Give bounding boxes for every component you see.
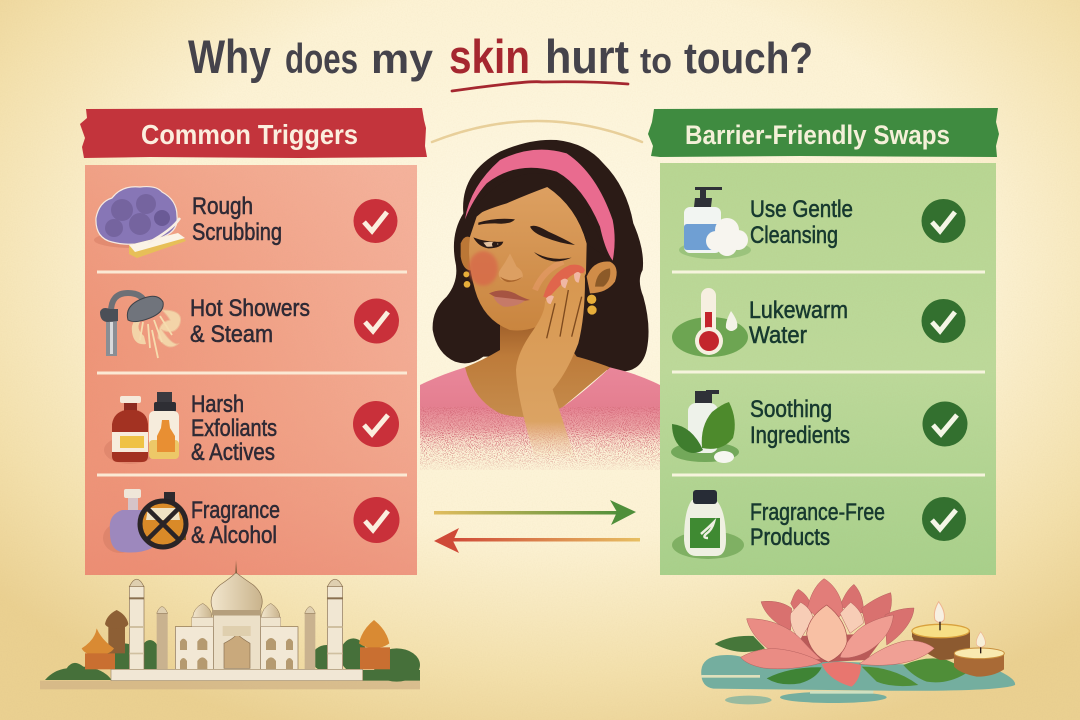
icon: shower head with steam [100, 293, 181, 358]
label: Lukewarm [749, 297, 848, 324]
ribbon: swaps heading: Barrier-Friendly Swaps [685, 120, 950, 150]
check badge [354, 199, 398, 243]
hand and forearm [516, 273, 585, 458]
label: Water [749, 322, 807, 349]
domes [192, 560, 281, 627]
row: fragrance-free products [672, 490, 966, 559]
plinth [111, 669, 363, 681]
icon: thermometer and droplet [672, 288, 748, 357]
candles [912, 602, 1004, 677]
shirt speckled fade [420, 407, 660, 470]
ground [40, 681, 420, 689]
trees [45, 638, 420, 682]
check badge [922, 199, 966, 243]
label: & Alcohol [191, 522, 277, 549]
title underline [452, 82, 628, 91]
label: Use Gentle [750, 196, 853, 223]
label: Rough [192, 193, 253, 220]
panel: common triggers [80, 108, 427, 575]
headband [465, 150, 615, 261]
decorative arc above portrait [432, 121, 642, 142]
row: gentle cleansing [679, 187, 966, 259]
lips [489, 290, 530, 307]
label: Fragrance [191, 497, 280, 524]
fingertips and lines [546, 272, 582, 338]
label [750, 396, 850, 449]
title [188, 30, 813, 91]
illustration: taj mahal [40, 560, 420, 689]
label [750, 499, 885, 551]
title: does [285, 35, 358, 82]
minarets [129, 579, 343, 669]
label: Cleansing [750, 222, 838, 249]
row: hot showers and steam [100, 293, 399, 358]
icon: crossed out perfume bottles [103, 489, 186, 553]
arrow: swaps to triggers [434, 528, 640, 553]
row: harsh exfoliants and actives [104, 391, 399, 466]
lotus petals back [761, 579, 914, 645]
hair fringe [467, 173, 607, 257]
row: fragrance and alcohol [103, 489, 400, 553]
check badge [922, 299, 966, 343]
lotus centre petal [807, 605, 847, 662]
label: Exfoliants [191, 415, 277, 442]
brows and eyes [473, 219, 575, 262]
check badge [922, 402, 968, 446]
neck and chest [465, 323, 610, 417]
side buildings [82, 610, 390, 669]
label [750, 196, 853, 249]
label: Products [750, 524, 830, 551]
nose [499, 253, 523, 282]
earrings [463, 271, 597, 315]
icon: pump bottle with foam [679, 187, 751, 259]
label: Fragrance-Free [750, 499, 885, 526]
label: & Steam [190, 321, 273, 348]
title: to [640, 40, 672, 81]
lotus petals middle [741, 602, 934, 669]
check badge [353, 401, 399, 447]
label [191, 391, 277, 466]
ears and face [461, 187, 617, 331]
title: Why [188, 30, 271, 83]
label: Hot Showers [190, 295, 310, 322]
ribbon: common triggers heading: Common Triggers [141, 119, 358, 150]
illustration: lotus and candles [701, 579, 1015, 704]
label: & Actives [191, 439, 275, 466]
portrait: woman touching sore cheek [420, 140, 660, 470]
title: my [371, 35, 434, 82]
title: touch? [684, 34, 813, 83]
check badge [354, 298, 399, 344]
check badge [354, 497, 400, 543]
label [190, 295, 310, 348]
main hall [175, 615, 298, 669]
row: lukewarm water [672, 288, 966, 357]
hair back [433, 140, 649, 372]
row: soothing ingredients [671, 390, 968, 463]
lotus base shadow [777, 633, 887, 663]
label [191, 497, 280, 549]
shirt [420, 367, 660, 453]
icon: sponge and soap [94, 187, 186, 258]
arrow: triggers to swaps [434, 500, 636, 525]
check badge [922, 497, 966, 541]
label: Harsh [191, 391, 244, 418]
icon: two bottles [104, 392, 179, 464]
ribbon: swaps heading [648, 108, 999, 157]
row: rough scrubbing [94, 187, 398, 258]
title: skin [449, 30, 530, 83]
label [749, 297, 848, 349]
label: Scrubbing [192, 219, 282, 246]
icon: bottle with leaves [671, 390, 739, 463]
leaves [715, 636, 966, 686]
lotus lower petal [822, 662, 861, 687]
label: Ingredients [750, 422, 850, 449]
label: Soothing [750, 396, 832, 423]
icon: fragrance-free bottle [672, 490, 744, 559]
label [192, 193, 282, 246]
panel: barrier-friendly swaps [648, 108, 999, 575]
title: hurt [545, 30, 629, 83]
ribbon: common triggers heading [80, 108, 427, 158]
water [701, 655, 1015, 704]
